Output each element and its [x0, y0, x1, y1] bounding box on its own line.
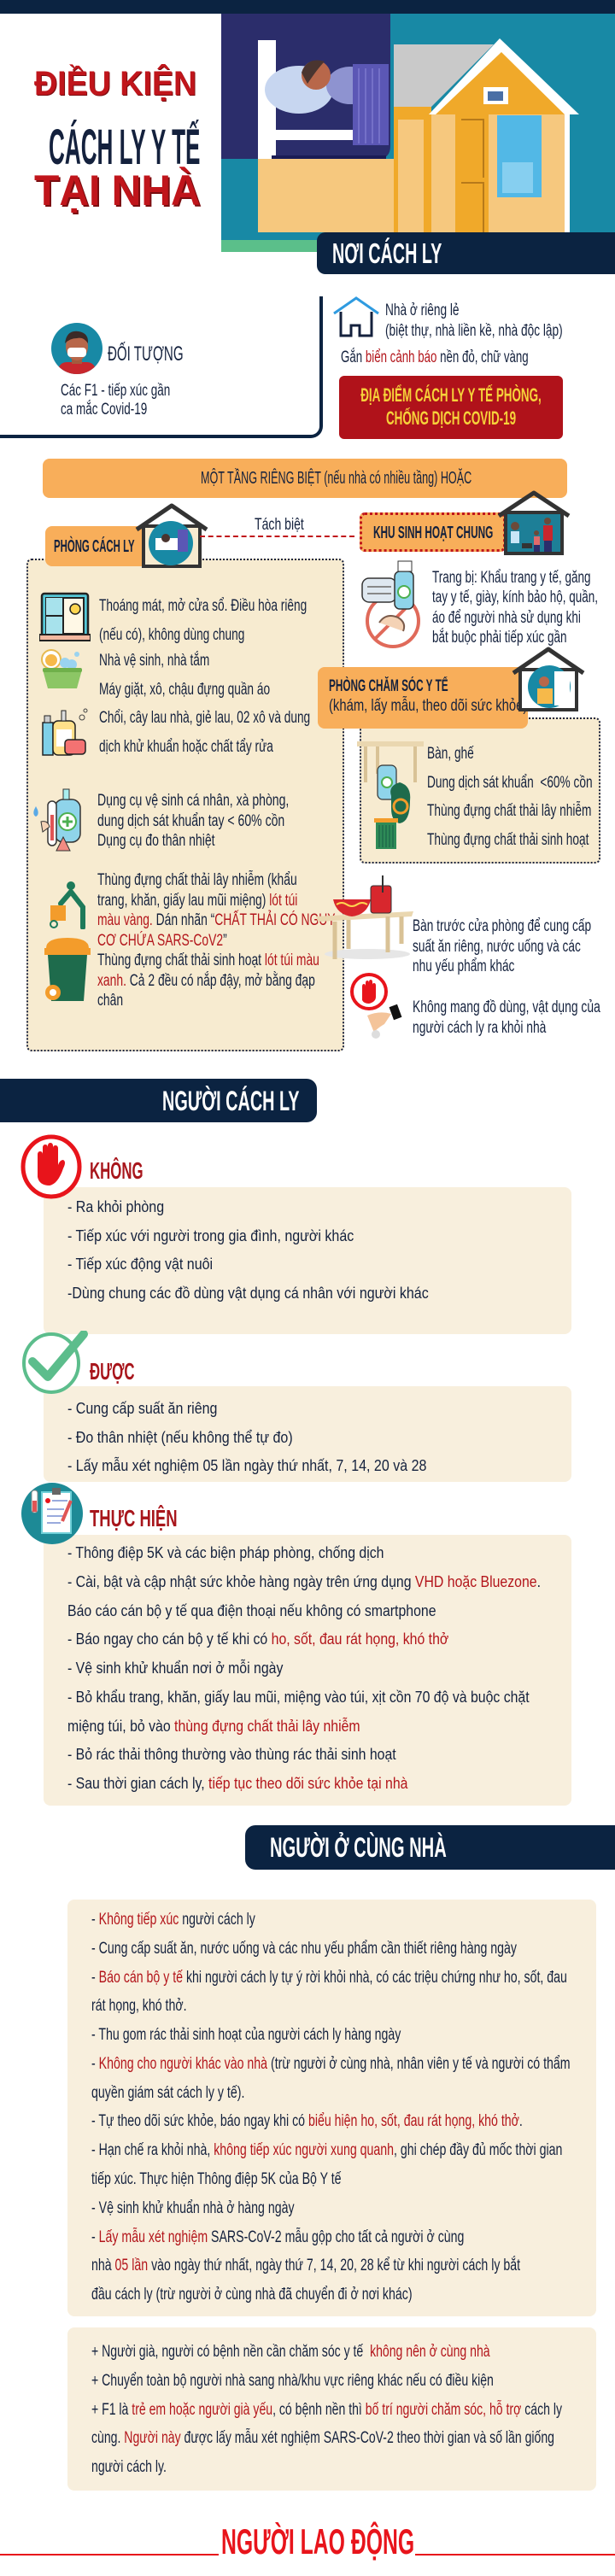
box: được list: - Lấy mẫu xét nghiệm 05 lần ngày thứ nhất, 7, 14, 20 và 28: [67, 1457, 426, 1474]
title: TẠI NHÀ: [34, 167, 201, 214]
heading: KHÔNG: KHÔNG: [90, 1157, 144, 1184]
item: personal hygiene: dung dịch sát khuẩn tay < 60% cồn: [97, 811, 284, 830]
title: CÁCH LY Y TẾ: [49, 120, 200, 175]
box: household member duties: - Hạn chế ra khỏi nhà, không tiếp xúc người xung quanh, ghi chép đầy đủ mốc thời gian: [91, 2141, 562, 2159]
box: household member duties: nhà 05 lần vào ngày thứ nhất, ngày thứ 7, 14, 20, 28 kể từ khi người cách ly bắt: [91, 2257, 520, 2274]
item: waste bins: màu vàng. Dán nhãn “CHẤT THẢI CÓ NGUY: [97, 911, 336, 929]
item: cleaning tools: [42, 709, 310, 756]
item: do not take items out: [350, 973, 600, 1039]
box: thực hiện list: - Báo ngay cho cán bộ y tế khi có ho, sốt, đau rát họng, khó thở: [67, 1630, 448, 1648]
box: thực hiện list: - Cài, bật và cập nhật sức khỏe hàng ngày trên ứng dụng VHD hoặc Bluezone.: [67, 1573, 541, 1590]
box: không list: - Ra khỏi phòng: [67, 1198, 164, 1215]
box: household member duties: đầu cách ly (trừ người ở cùng nhà đã chuyển đi ở nơi khác): [91, 2286, 413, 2304]
box: notes for vulnerable people: + Chuyển toàn bộ người nhà sang nhà/khu vực riêng khác nếu có điều kiện: [91, 2372, 494, 2390]
item: cleaning tools: Chổi, cây lau nhà, giẻ lau, 02 xô và dung: [99, 709, 310, 727]
footer: logo Người Lao Động: NGƯỜI LAO ĐỘNG: [221, 2521, 414, 2561]
box: household member duties: - Không cho người khác vào nhà (trừ người ở cùng nhà, nhân viên y tế và người có thẩm: [91, 2055, 571, 2073]
box: thực hiện list: - Sau thời gian cách ly, tiếp tục theo dõi sức khỏe tại nhà: [67, 1775, 407, 1792]
item: table outside door: Bàn trước cửa phòng để cung cấp: [413, 917, 591, 935]
item: waste bins: [44, 870, 336, 1010]
item: personal hygiene: [33, 789, 289, 851]
icon: basin: [41, 649, 82, 688]
text: nhà ở riêng lẻ: Nhà ở riêng lẻ: [385, 302, 460, 319]
item: waste bins: Thùng đựng chất thải lây nhiễm (khẩu: [97, 871, 297, 889]
list: medical room items: [357, 741, 593, 849]
box: không list: - Tiếp xúc với người trong gia đình, người khác: [67, 1227, 354, 1244]
heading: NƠI CÁCH LY: NƠI CÁCH LY: [332, 237, 442, 269]
item: table outside door: [316, 875, 591, 975]
box: được list: - Cung cấp suất ăn riêng: [67, 1400, 217, 1417]
text: nhu yếu phẩm khác: [413, 957, 514, 975]
item: window ventilation: [39, 593, 307, 644]
icon: masked person avatar: [51, 323, 102, 374]
list: medical room items: Bàn, ghế: [427, 745, 474, 763]
item: waste bins: chân: [97, 992, 123, 1010]
icon: green bin: [44, 938, 91, 1001]
icon: person throwing waste: [50, 881, 85, 929]
heading: NGƯỜI CÁCH LY: NGƯỜI CÁCH LY: [162, 1086, 300, 1116]
box: household member duties: - Cung cấp suất ăn, nước uống và các nhu yếu phẩm cần thiết riêng hàng ngày: [91, 1940, 517, 1958]
box: khu sinh hoạt chung: [360, 512, 506, 552]
box: không list: -Dùng chung các đồ dùng vật dụng cá nhân với người khác: [67, 1285, 429, 1302]
list: medical room items: Thùng đựng chất thải sinh hoạt: [427, 831, 589, 849]
item: bathroom and laundry: Nhà vệ sinh, nhà tắm: [99, 652, 209, 670]
box: household member duties: rát họng, khó thở.: [91, 1997, 187, 2015]
heading: THỰC HIỆN: THỰC HIỆN: [90, 1505, 178, 1531]
item: window ventilation: Thoáng mát, mở cửa sổ. Điều hòa riêng: [99, 597, 307, 615]
red sign box: [339, 376, 563, 439]
box: không list: [44, 1187, 571, 1334]
top bar: [0, 0, 615, 14]
item: personal hygiene: Dụng cụ đo thân nhiệt: [97, 832, 215, 850]
item: protective equipment (right): tay y tế, giày, kính bảo hộ, quần,: [432, 588, 598, 606]
icon: house with patient: [135, 504, 208, 568]
tab: phòng chăm sóc y tế: (khám, lấy mẫu, theo dõi sức khỏe): [329, 697, 527, 715]
item: window ventilation: (nếu có), không dùng chung: [99, 626, 244, 644]
heading: NGƯỜI CÁCH LY: [0, 1079, 317, 1122]
list: medical room items: Dung dịch sát khuẩn <60% cồn: [427, 774, 593, 792]
box: notes for vulnerable people: + F1 là trẻ em hoặc người già yếu, có bệnh nền thì bố trí người chăm sóc, hỗ trợ cách ly: [91, 2400, 562, 2419]
item: bathroom and laundry: Máy giặt, xô, chậu đựng quần áo: [99, 681, 270, 699]
item: bathroom and laundry: [41, 649, 270, 699]
icon: bottles and soap: [42, 709, 87, 756]
tab: phòng chăm sóc y tế: [318, 667, 528, 729]
item: waste bins: xanh. Cả 2 đều có nắp đậy, mở bằng đạp: [97, 972, 315, 989]
box: household member duties: - Không tiếp xúc người cách ly: [91, 1911, 255, 1929]
text: Các F1: [61, 382, 170, 419]
item: protective equipment (right): bắt buộc phải tiếp xúc gần: [432, 629, 567, 647]
box: household member duties: - Tự theo dõi sức khỏe, báo ngay khi có biểu hiện ho, sốt, đau rát họng, khó thở.: [91, 2112, 523, 2130]
item: personal hygiene: Dụng cụ vệ sinh cá nhân, xà phòng,: [97, 792, 289, 810]
text: nhà ở riêng lẻ: [385, 302, 563, 340]
text: gắn biển cảnh báo: Gắn biển cảnh báo nền đỏ, chữ vàng: [341, 348, 529, 366]
text: nhà ở riêng lẻ: (biệt thự, nhà liền kề, nhà độc lập): [385, 322, 563, 340]
box: household member duties: - Thu gom rác thải sinh hoạt của người cách ly hàng ngày: [91, 2026, 401, 2044]
box: thực hiện list: miệng túi, bỏ vào thùng đựng chất thải lây nhiễm: [67, 1717, 360, 1734]
box: household member duties: - Vệ sinh khử khuẩn nhà ở hàng ngày: [91, 2199, 295, 2217]
icon: medical clipboard: [21, 1483, 83, 1544]
section: THỰC HIỆN: [21, 1483, 571, 1806]
item: cleaning tools: dịch khử khuẩn hoặc chất tẩy rửa: [99, 738, 273, 756]
orange banner: một tầng riêng biệt: [43, 459, 567, 498]
box: thực hiện list: - Thông điệp 5K và các biện pháp phòng, chống dịch: [67, 1544, 384, 1561]
box: notes for vulnerable people: người cách ly.: [91, 2458, 167, 2476]
panel: phòng cách ly (dotted): [26, 559, 344, 1051]
red sign box: ĐỊA ĐIỂM CÁCH LY Y TẾ PHÒNG,: [360, 384, 542, 406]
icon: table, sanitizer, bags, bin: [357, 741, 424, 849]
item: protective equipment (right): Trang bị: Khẩu trang y tế, găng: [432, 569, 590, 587]
icon: stop hand: [20, 1134, 82, 1199]
section: KHÔNG: [20, 1134, 571, 1334]
panel: đối tượng: [0, 296, 323, 438]
box: household member duties: - Báo cán bộ y tế khi người cách ly tự ý rời khỏi nhà, có các triệu chứng như ho, sốt, đau: [91, 1969, 567, 1987]
heading: ĐƯỢC: ĐƯỢC: [90, 1358, 135, 1385]
label: tách biệt + dashed connector: Tách biệt: [255, 516, 304, 534]
tab: phòng chăm sóc y tế: PHÒNG CHĂM SÓC Y TẾ: [329, 677, 448, 695]
item: waste bins: trang, khăn, giấy lau mũi miệng) lót túi: [97, 892, 297, 909]
title: [34, 64, 202, 214]
item: protective equipment (right): [361, 560, 598, 648]
heading: NGƯỜI Ở CÙNG NHÀ: NGƯỜI Ở CÙNG NHÀ: [270, 1832, 447, 1863]
orange banner: một tầng riêng biệt: MỘT TẦNG RIÊNG BIỆT (nếu nhà có nhiều tầng) HOẶC: [201, 469, 472, 488]
text: Các F1: Các F1 - tiếp xúc gần: [61, 382, 170, 400]
item: table outside door: suất ăn riêng, nước uống và các: [413, 938, 581, 955]
box: được list: - Đo thân nhiệt (nếu không thể tự đo): [67, 1429, 293, 1446]
icon: sanitizer and thermometer: [33, 789, 81, 851]
heading: NƠI CÁCH LY: [317, 232, 615, 274]
icon: mask, spray, no handshake: [361, 560, 420, 648]
panel: phòng chăm sóc y tế (dotted): [360, 717, 600, 864]
heading: NGƯỜI Ở CÙNG NHÀ: [245, 1825, 615, 1870]
title: ĐIỀU KIỆN: [34, 65, 196, 102]
box: household member duties: [67, 1900, 596, 2316]
item: waste bins: CƠ CHỨA SARS-CoV2”: [97, 931, 227, 950]
box: thực hiện list: - Bỏ khẩu trang, khăn, giấy lau mũi, miệng vào túi, xịt cồn 70 độ và buộc chặt: [67, 1689, 530, 1706]
icon: house with family: [497, 490, 571, 555]
box: household member duties: tiếp xúc. Thực hiện Thông điệp 5K của Bộ Y tế: [91, 2170, 342, 2188]
box: household member duties: - Lấy mẫu xét nghiệm SARS-CoV-2 mẫu gộp cho tất cả người ở cùng: [91, 2228, 464, 2246]
box: không list: - Tiếp xúc động vật nuôi: [67, 1256, 213, 1273]
box: khu sinh hoạt chung: KHU SINH HOẠT CHUNG: [373, 524, 493, 542]
box: thực hiện list: - Vệ sinh khử khuẩn nơi ở mỗi ngày: [67, 1660, 283, 1677]
list: medical room items: Thùng đựng chất thải lây nhiễm: [427, 802, 591, 820]
box: notes for vulnerable people: [67, 2327, 596, 2491]
tab: phòng cách ly: PHÒNG CÁCH LY: [54, 537, 135, 556]
icon: blue house outline: [333, 296, 379, 337]
text: Các F1: ca mắc Covid-19: [61, 401, 147, 419]
box: notes for vulnerable people: + Người già, người có bệnh nền cần chăm sóc y tế không nên ở cùng nhà: [91, 2343, 490, 2361]
icon: table with food: [316, 875, 413, 959]
icon: stop hand: [350, 973, 401, 1039]
item: do not take items out: người cách ly ra khỏi nhà: [413, 1018, 546, 1037]
box: được list: [44, 1386, 571, 1482]
icon: green check: [22, 1331, 88, 1394]
icon: house with doctor: [512, 647, 584, 711]
tab: phòng cách ly: [45, 526, 153, 566]
section: ĐƯỢC: [22, 1331, 571, 1482]
box: thực hiện list: [44, 1535, 571, 1806]
hero illustration: bedroom and house: [221, 14, 615, 252]
red sign box: CHỐNG DỊCH COVID-19: [386, 407, 516, 429]
item: waste bins: Thùng đựng chất thải sinh hoạt lót túi màu: [97, 951, 319, 969]
icon: window: [39, 593, 91, 641]
box: thực hiện list: - Bỏ rác thải thông thường vào thùng rác thải sinh hoạt: [67, 1746, 396, 1763]
box: household member duties: quyền giám sát cách ly y tế).: [91, 2084, 244, 2102]
text: ĐỐI TƯỢNG: ĐỐI TƯỢNG: [108, 342, 184, 366]
item: do not take items out: Không mang đồ dùng, vật dụng của: [413, 998, 600, 1016]
item: protective equipment (right): áo để người nhà sử dụng khi: [432, 609, 581, 627]
box: notes for vulnerable people: cùng. Người này được lấy mẫu xét nghiệm SARS-CoV-2 theo thời gian và số lần giống: [91, 2429, 554, 2447]
box: thực hiện list: Báo cáo cán bộ y tế qua điện thoại nếu không có smartphone: [67, 1602, 436, 1619]
